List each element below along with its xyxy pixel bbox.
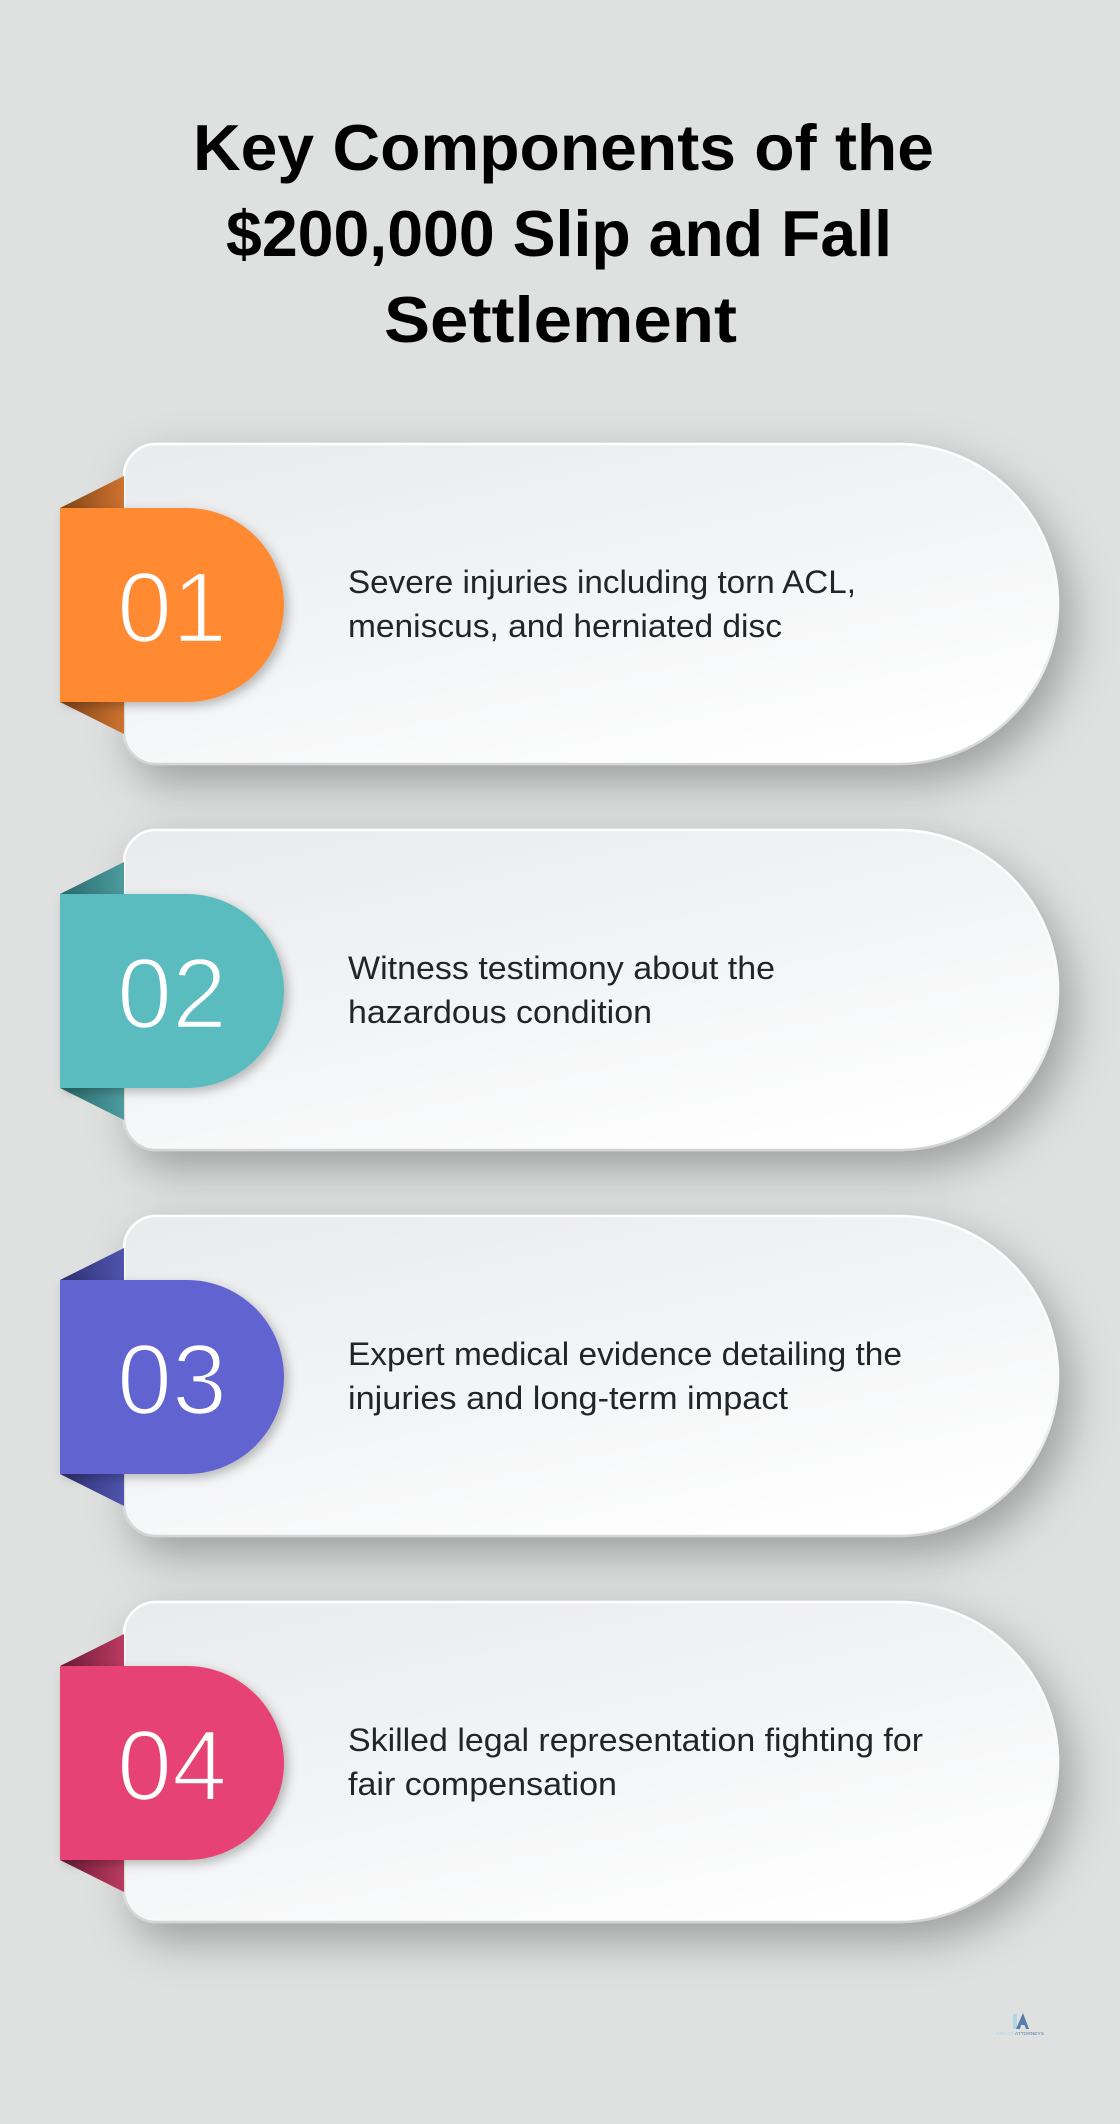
number 04: 04 xyxy=(117,1710,227,1822)
fold top 01 xyxy=(60,476,124,508)
text 02 xyxy=(348,950,775,1030)
card 01 xyxy=(124,444,1058,764)
text 04 xyxy=(348,1722,923,1802)
title: Key Components of the xyxy=(193,111,934,184)
text 04: fair compensation xyxy=(348,1766,617,1802)
text 03: Expert medical evidence detailing the xyxy=(348,1336,902,1372)
logo wordmark: IMPACT ATTORNEYS xyxy=(996,2031,1044,2036)
card 04 xyxy=(124,1602,1058,1922)
fold bottom 03 xyxy=(60,1474,124,1506)
number 03: 03 xyxy=(117,1324,227,1436)
title xyxy=(193,111,934,356)
number 02: 02 xyxy=(117,938,227,1050)
text 02: hazardous condition xyxy=(348,994,652,1030)
title: Settlement xyxy=(384,283,737,356)
fold bottom 02 xyxy=(60,1088,124,1120)
number tab 01 xyxy=(60,508,284,702)
text 03: injuries and long-term impact xyxy=(348,1380,788,1416)
text 01 xyxy=(348,564,856,644)
text 01: Severe injuries including torn ACL, xyxy=(348,564,856,600)
text 04: Skilled legal representation fighting for xyxy=(348,1722,923,1758)
card 02 xyxy=(124,830,1058,1150)
card 03 xyxy=(124,1216,1058,1536)
fold bottom 04 xyxy=(60,1860,124,1892)
panel: item 03 xyxy=(60,1216,1058,1536)
number tab 04 xyxy=(60,1666,284,1860)
title: $200,000 Slip and Fall xyxy=(226,197,892,270)
panel: item 02 xyxy=(60,830,1058,1150)
text 03 xyxy=(348,1336,902,1416)
logo xyxy=(996,2013,1044,2036)
number tab 03 xyxy=(60,1280,284,1474)
logo mark xyxy=(1013,2013,1029,2029)
panel: item 04 xyxy=(60,1602,1058,1922)
fold top 04 xyxy=(60,1634,124,1666)
fold top 03 xyxy=(60,1248,124,1280)
fold bottom 01 xyxy=(60,702,124,734)
number tab 02 xyxy=(60,894,284,1088)
number 01: 01 xyxy=(117,552,227,664)
text 01: meniscus, and herniated disc xyxy=(348,608,782,644)
fold top 02 xyxy=(60,862,124,894)
text 02: Witness testimony about the xyxy=(348,950,775,986)
panel: item 01 xyxy=(60,444,1058,764)
